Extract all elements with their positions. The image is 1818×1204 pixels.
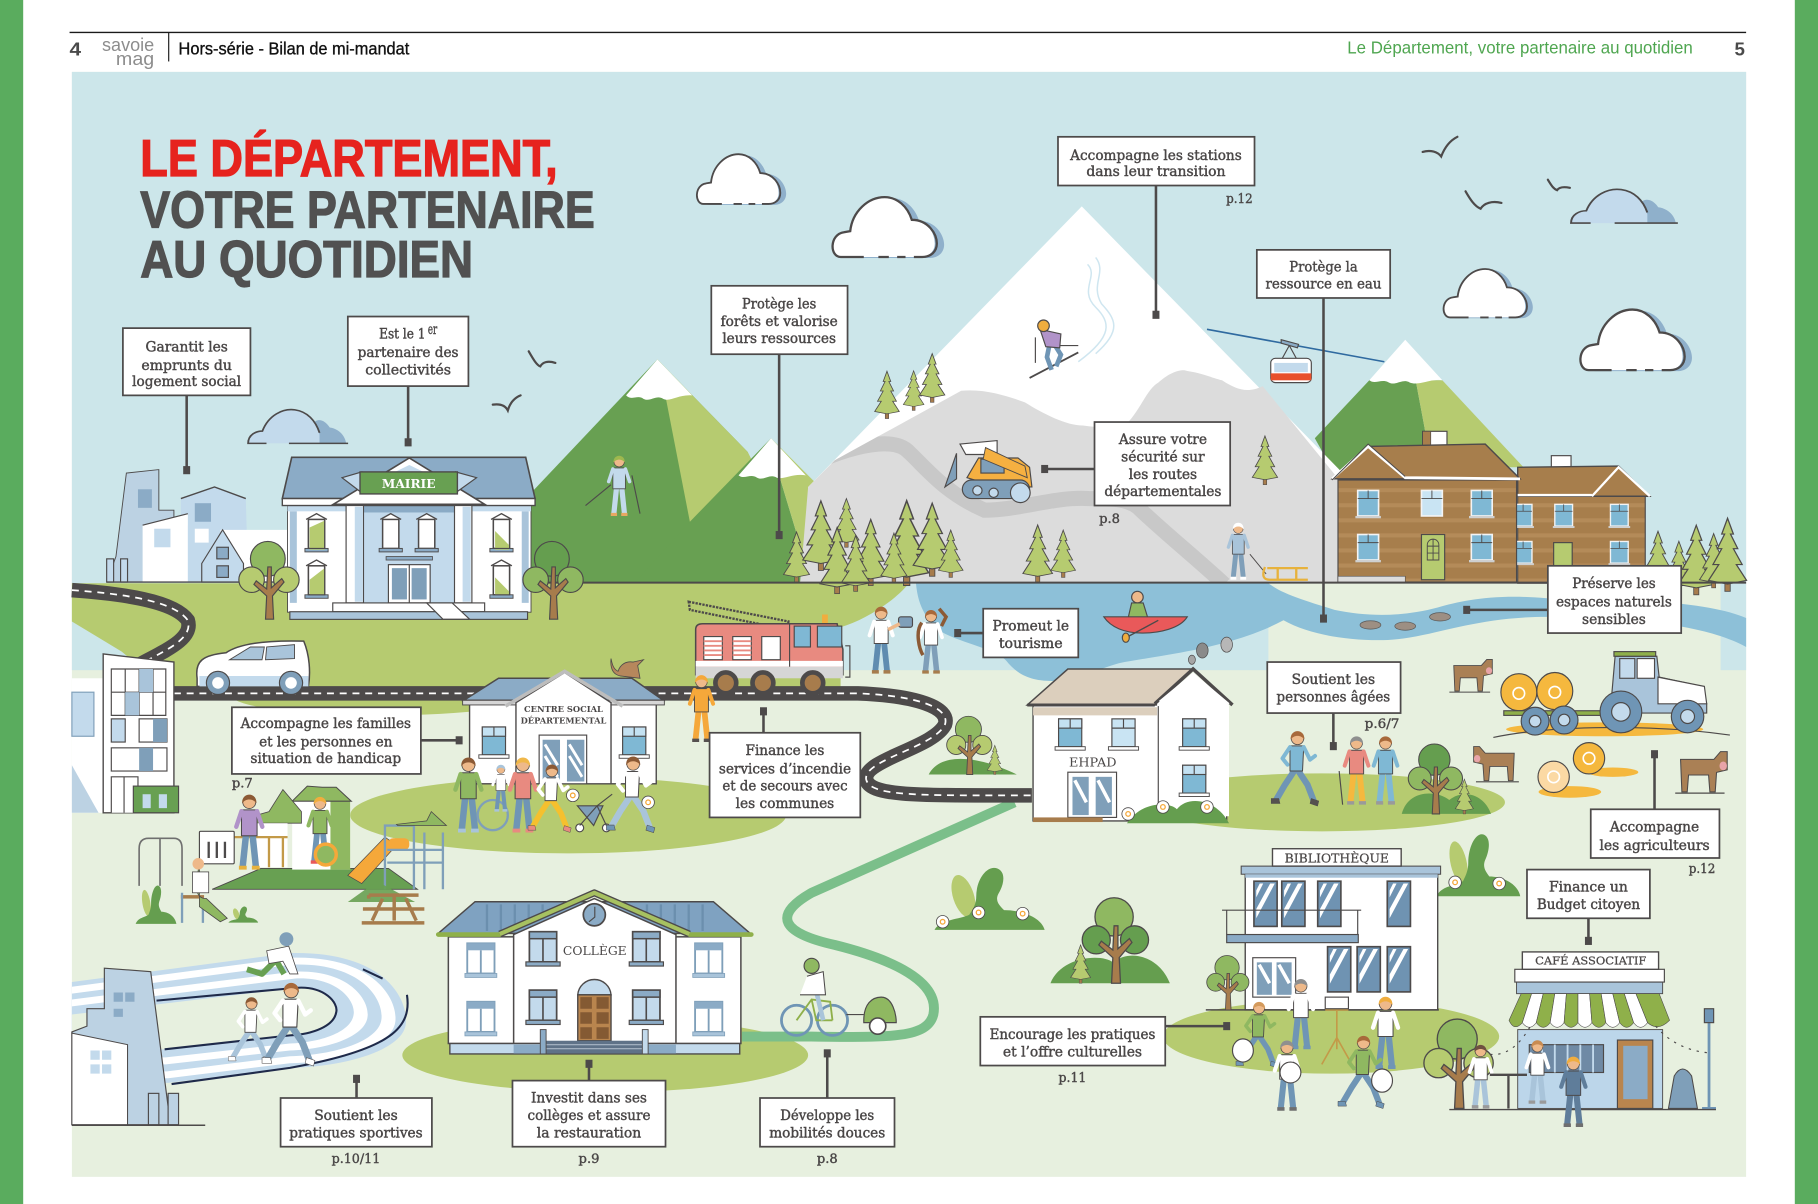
- page header: savoie: [102, 34, 154, 55]
- town hall windows: [305, 514, 513, 598]
- callout: pratiques culturelles: [980, 1017, 1230, 1086]
- callout: collectivités: collectivités: [365, 363, 451, 379]
- firefighter: [690, 675, 713, 742]
- kayak: [1104, 591, 1187, 642]
- callout: mobilités douces: p.8: [817, 1152, 838, 1167]
- callout: collectivités: partenaire des: [358, 345, 459, 361]
- callout: mobilités douces: mobilités douces: [769, 1125, 885, 1141]
- EHPAD building: [1027, 669, 1232, 823]
- callout: routes départementales: départementales: [1104, 484, 1221, 500]
- tree and bush by the seniors: [1402, 744, 1491, 814]
- cable car: [1207, 329, 1384, 383]
- picnic table: [348, 881, 415, 902]
- callout: incendie et secours: [710, 707, 860, 817]
- callout: mobilités douces: Développe les: [780, 1108, 874, 1124]
- title: [140, 130, 595, 289]
- college sign: COLLÈGE: [563, 943, 627, 958]
- callout: personnes âgées: Soutient les: [1292, 672, 1375, 688]
- college building: [438, 893, 751, 1054]
- callout: incendie et secours: Finance les: [746, 743, 824, 759]
- athletics track: [72, 932, 408, 1084]
- callout: forêts: [711, 286, 848, 539]
- seated parent: [181, 858, 227, 923]
- fire engine: [689, 602, 850, 693]
- sports complex building: [72, 968, 205, 1125]
- callout: logement social: Garantit les: [146, 339, 228, 355]
- park tree and pine: [1050, 898, 1170, 983]
- callout: familles et handicap: situation de handicap: [250, 751, 401, 767]
- callout: incendie et secours: les communes: [736, 796, 834, 812]
- white car: [197, 641, 310, 695]
- second chalet wing: [1512, 456, 1650, 583]
- callout: collèges et restauration: [512, 1060, 666, 1167]
- callout: logement social: logement social: [132, 374, 242, 390]
- social centre sign: DÉPARTEMENTAL: [521, 714, 606, 726]
- town hall (Mairie): [282, 457, 535, 619]
- Mairie banner: MAIRIE: [382, 477, 436, 491]
- left green edge band: [0, 0, 23, 1204]
- sledder: [1228, 523, 1308, 580]
- callout: collèges et restauration: p.9: [579, 1152, 599, 1167]
- callout: routes départementales: p.8: [1099, 512, 1120, 527]
- page header: 4: [70, 39, 82, 60]
- callout: familles et handicap: Accompagne les familles: [240, 716, 411, 732]
- flowering bushes: [935, 834, 1520, 930]
- clouds: [248, 154, 1692, 443]
- right green edge band: [1795, 0, 1818, 1204]
- café sign: CAFÉ ASSOCIATIF: [1535, 954, 1647, 968]
- callout: pratiques culturelles: Encourage les pratiques: [990, 1027, 1155, 1043]
- playground: [136, 786, 446, 924]
- play tower: [232, 786, 351, 870]
- EHPAD sign: EHPAD: [1069, 755, 1117, 769]
- title: LE DÉPARTEMENT,: [140, 130, 558, 188]
- callout: pratiques sportives: p.10/11: [332, 1152, 380, 1167]
- callout: espaces naturels: Préserve les: [1572, 576, 1656, 592]
- callout: pratiques sportives: [281, 1075, 432, 1167]
- social centre sign: CENTRE SOCIAL: [524, 705, 603, 715]
- callout: familles et handicap: [232, 707, 463, 791]
- library sign: [1272, 849, 1401, 866]
- title: AU QUOTIDIEN: [140, 231, 473, 289]
- cat on roof: [611, 659, 643, 678]
- callout: logement social: emprunts du: [141, 358, 232, 374]
- fish and stones: [1188, 613, 1450, 664]
- callout: agriculteurs: p.12: [1689, 862, 1715, 877]
- social centre building: [463, 671, 664, 784]
- callout: forêts: leurs ressources: [722, 331, 836, 347]
- callout: forêts: forêts et valorise: [721, 314, 838, 330]
- college door: [578, 980, 611, 1041]
- callout: agriculteurs: les agriculteurs: [1599, 838, 1710, 854]
- callout: pratiques sportives: Soutient les: [314, 1108, 398, 1124]
- callout: routes départementales: [1041, 422, 1230, 527]
- callout: tourisme: [954, 609, 1078, 657]
- callout: familles et handicap: p.7: [232, 776, 253, 791]
- callout: tourisme: tourisme: [999, 636, 1063, 652]
- callout: familles et handicap: et les personnes en: [259, 735, 393, 751]
- callout: collèges et restauration: la restauration: [537, 1125, 641, 1141]
- callout: agriculteurs: [1591, 750, 1719, 877]
- cows: [1449, 659, 1727, 793]
- callout: budget citoyen: Finance un: [1549, 880, 1628, 896]
- social centre sign: [521, 705, 606, 726]
- café sign: [1522, 952, 1659, 969]
- callout: budget citoyen: Budget citoyen: [1537, 897, 1640, 913]
- callout: routes départementales: les routes: [1129, 467, 1197, 483]
- hiker: [586, 456, 640, 516]
- apartment block: [72, 654, 179, 813]
- loose hay bales: [1538, 743, 1638, 798]
- callout: routes départementales: Assure votre: [1118, 432, 1207, 448]
- horizon line: [545, 582, 1746, 584]
- page header: Hors-série - Bilan de mi-mandat: [179, 38, 409, 58]
- callout: stations: dans leur transition: [1086, 164, 1226, 180]
- callout: tourisme: Promeut le: [992, 619, 1069, 635]
- main chalet: [1332, 431, 1520, 582]
- callout: incendie et secours: et de secours avec: [722, 779, 848, 795]
- families group: [455, 757, 655, 833]
- callout: personnes âgées: [1267, 662, 1401, 750]
- birds: [493, 137, 1570, 410]
- callout: ressource en eau: [1257, 250, 1390, 623]
- snowplow: [945, 441, 1032, 503]
- river: [916, 583, 1746, 681]
- cyclist with trailer: [781, 958, 896, 1035]
- callout: agriculteurs: Accompagne: [1609, 819, 1699, 835]
- callout: forêts: Protège les: [742, 296, 816, 312]
- page header: 5: [1735, 39, 1745, 60]
- callout: stations: [1058, 137, 1255, 319]
- swings: [139, 838, 182, 886]
- title: VOTRE PARTENAIRE: [140, 181, 595, 239]
- callout: pratiques culturelles: p.11: [1059, 1071, 1086, 1086]
- trees beside the Mairie: [239, 541, 583, 619]
- callout: stations: Accompagne les stations: [1069, 148, 1242, 164]
- mountain range: green left peaks: [510, 359, 904, 583]
- climbing frame: [385, 826, 444, 889]
- callout: budget citoyen: [1527, 870, 1650, 945]
- callout: personnes âgées: personnes âgées: [1277, 689, 1390, 705]
- library sign: BIBLIOTHÈQUE: [1285, 851, 1389, 866]
- callout: collectivités: [348, 317, 468, 446]
- page header: [70, 32, 1746, 69]
- callout: personnes âgées: p.6/7: [1365, 717, 1399, 732]
- library building: [1206, 849, 1441, 1010]
- kneeling runner: [247, 932, 298, 974]
- callout: espaces naturels: espaces naturels: [1556, 594, 1672, 610]
- park tree near EHPAD: [929, 716, 1017, 775]
- clock: [583, 904, 605, 926]
- callout: logement social: [123, 328, 250, 474]
- callout: collèges et restauration: collèges et assure: [528, 1108, 650, 1124]
- right small mountain: [1315, 340, 1524, 533]
- pine forest: [784, 354, 1747, 595]
- callout: collectivités: er: [428, 322, 437, 338]
- callout: ressource en eau: ressource en eau: [1266, 277, 1382, 293]
- callout: pratiques culturelles: et l’offre culturelles: [1003, 1044, 1142, 1060]
- ground left of horizon: [72, 583, 909, 696]
- callout: incendie et secours: services d’incendie: [719, 761, 851, 777]
- seniors group: [1271, 731, 1397, 806]
- callout: collèges et restauration: Investit dans ses: [531, 1091, 647, 1107]
- page header: Le Département, votre partenaire au quotidien: [1347, 37, 1693, 57]
- chalet: [1332, 431, 1650, 583]
- slide: [348, 837, 397, 884]
- callout: pratiques sportives: pratiques sportives: [289, 1125, 423, 1141]
- big snowy mountain: [800, 206, 1345, 584]
- striped awning: [1509, 994, 1670, 1027]
- town hall door: [388, 565, 430, 603]
- tractor body: [1521, 652, 1707, 735]
- accessible play sign: [199, 831, 234, 864]
- callout: stations: p.12: [1226, 192, 1253, 207]
- callout: ressource en eau: Protège la: [1289, 259, 1358, 275]
- associative café: [1424, 952, 1716, 1127]
- tractor and bales: [1493, 652, 1730, 737]
- tourists: [870, 607, 946, 674]
- callout: espaces naturels: sensibles: [1582, 612, 1646, 628]
- callout: espaces naturels: [1463, 566, 1681, 633]
- light green lawns: [350, 773, 1505, 1092]
- page header: mag: [116, 48, 154, 69]
- road: [72, 590, 1032, 795]
- city skyline: [107, 470, 288, 582]
- Mairie banner: [342, 472, 477, 494]
- columns: [346, 506, 472, 603]
- greenway cycle path: [742, 802, 1015, 1037]
- musicians: [1232, 979, 1398, 1111]
- hay bales on trailer: [1501, 672, 1617, 715]
- callout: mobilités douces: [760, 1049, 895, 1167]
- callout: routes départementales: sécurité sur: [1121, 449, 1205, 465]
- callout: collectivités: Est le 1: [379, 327, 426, 343]
- skier: [1030, 320, 1078, 378]
